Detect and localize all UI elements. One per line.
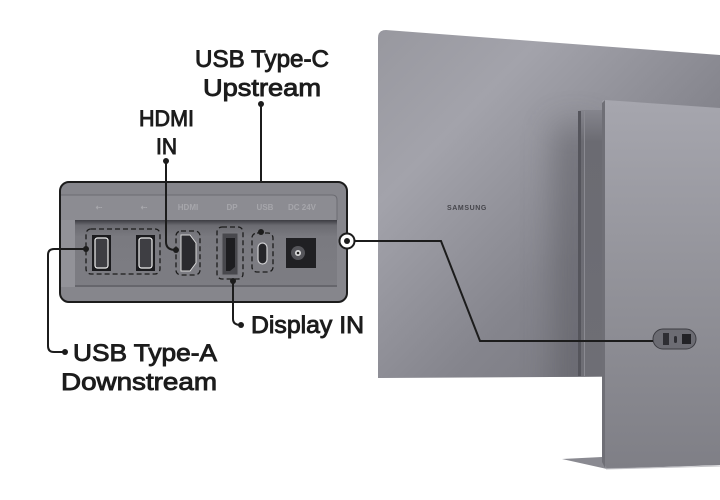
connector ring marker <box>340 234 354 248</box>
port labels: DC 24V <box>288 203 317 212</box>
port labels: ⇠ <box>141 203 148 212</box>
label: usb type-c upstream <box>195 46 329 102</box>
label: usb type-c upstream: USB Type-C <box>195 46 329 73</box>
label: display in: Display IN <box>251 312 364 339</box>
port labels: DP <box>226 203 238 212</box>
leader lines <box>48 104 653 352</box>
recessed bay <box>75 220 337 287</box>
label: usb type-c upstream: Upstream <box>203 75 321 102</box>
monitor neck <box>578 110 604 376</box>
port panel <box>60 182 347 302</box>
monitor rear panel <box>378 30 720 415</box>
stand column <box>602 100 720 469</box>
dc power port <box>286 238 316 268</box>
stand foot <box>562 457 720 469</box>
label: usb type-a downstream: USB Type-A <box>73 340 217 367</box>
displayport port <box>222 233 238 275</box>
usb a port 2 <box>136 235 155 271</box>
label: usb type-a downstream <box>61 340 217 396</box>
dashed port groups <box>86 227 273 279</box>
label: hdmi in <box>139 106 194 159</box>
label: hdmi in: HDMI <box>139 106 194 131</box>
port labels: HDMI <box>178 203 198 212</box>
top label band <box>61 195 337 220</box>
label: hdmi in: IN <box>156 134 177 159</box>
usb c port <box>258 243 267 264</box>
samsung logo: SAMSUNG <box>447 205 487 212</box>
usb a port 1 <box>92 235 111 271</box>
hdmi port <box>181 235 196 271</box>
port labels: ⇠ <box>96 203 103 212</box>
rear port cutout <box>653 329 696 349</box>
port labels: USB <box>257 203 274 212</box>
leader dots <box>62 101 264 355</box>
label: usb type-a downstream: Downstream <box>61 369 217 396</box>
port labels <box>96 203 317 212</box>
